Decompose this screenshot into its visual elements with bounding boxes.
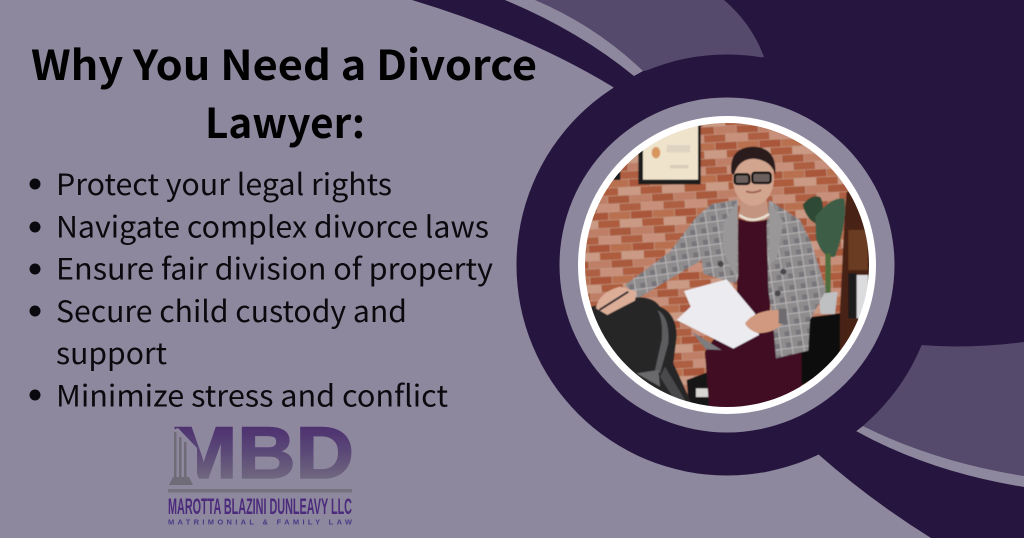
left hand with pen [596, 287, 637, 315]
logo column [168, 428, 197, 485]
bullet: property: Ensure fair division of property [56, 246, 493, 288]
dark circle ring [516, 54, 938, 476]
title: Why You Need a Divorce [31, 32, 537, 92]
bullet list [30, 162, 493, 416]
buttons [718, 261, 786, 296]
chair [591, 296, 691, 402]
papers [677, 279, 759, 349]
plant [803, 196, 845, 314]
dark background shape [412, 0, 1024, 538]
bullet: stress: Minimize stress and conflict [56, 374, 448, 416]
logo tagline: MATRIMONIAL & FAMILY LAW [168, 518, 353, 526]
blazer left side and arm [625, 199, 738, 298]
glasses [735, 173, 771, 184]
neck [738, 200, 769, 221]
bullet: custody [30, 289, 407, 373]
logo letters: MBD [170, 413, 354, 494]
bullet: divorce laws: Navigate complex divorce laws [56, 204, 489, 246]
lilac circle ring [560, 98, 894, 432]
lapels [723, 200, 738, 278]
mouth [746, 190, 761, 192]
text: MAROTTA BLAZINI DUNLEAVY LLC [168, 494, 352, 519]
bullet: custody: support [56, 331, 167, 373]
title [31, 32, 537, 150]
white circle border [578, 116, 876, 414]
skirt and dress [705, 218, 802, 420]
bottom accent curve [856, 342, 1024, 487]
framed certificate [638, 120, 701, 184]
floor items [686, 372, 710, 406]
head [733, 151, 774, 206]
necklace [739, 214, 769, 220]
wood shelf [839, 191, 869, 352]
brick wall [585, 123, 849, 396]
bullet: protect rights: Protect your legal rights [56, 162, 392, 204]
photo: lawyer in office [585, 123, 869, 407]
logo: MBD [168, 413, 354, 526]
title: Lawyer: [205, 90, 365, 150]
top accent curve [505, 0, 764, 76]
hair [731, 147, 775, 175]
blazer right side and arm [767, 200, 826, 358]
bullet: custody: Secure child custody and [56, 289, 407, 331]
dark side table [800, 313, 840, 387]
right hand and watch [745, 310, 783, 333]
